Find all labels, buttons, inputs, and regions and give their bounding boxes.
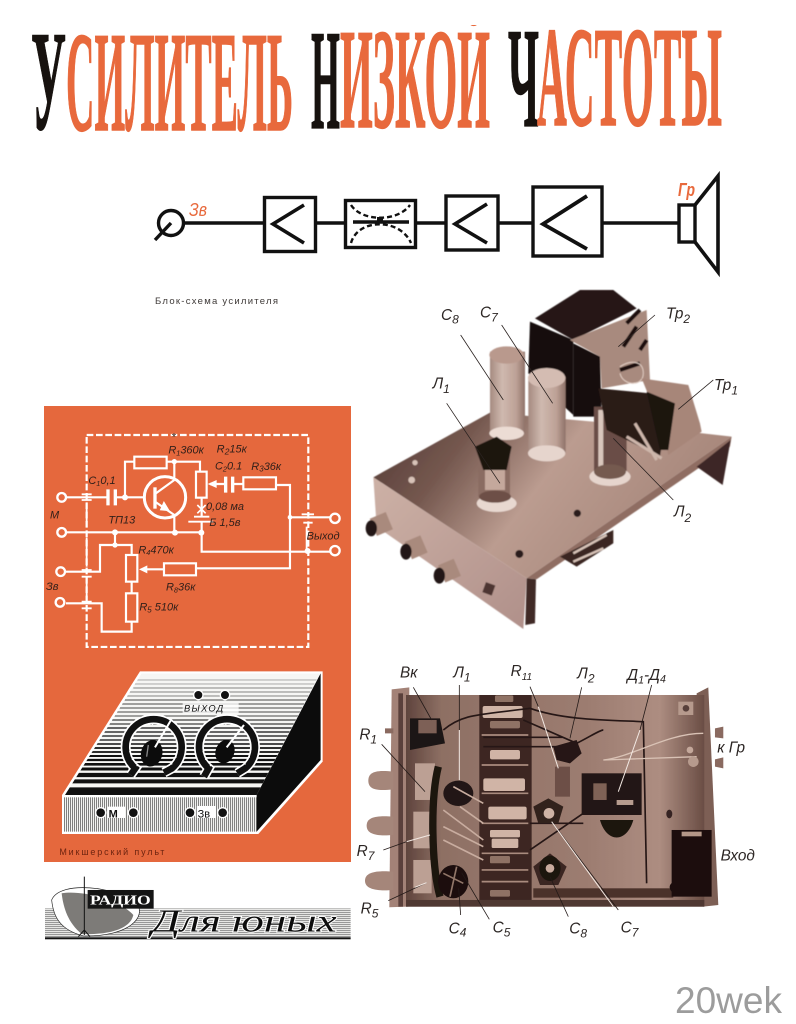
striped band xyxy=(45,908,351,938)
illustration: mixing console xyxy=(59,670,327,857)
component labels: С xyxy=(569,920,580,937)
circuit labels: 360к xyxy=(180,444,205,456)
antenna ellipse xyxy=(52,888,139,936)
transistor xyxy=(144,477,186,518)
front jacks and labels: Зв xyxy=(198,808,210,820)
switch xyxy=(410,718,445,750)
dial: left xyxy=(126,719,182,775)
resistors on board xyxy=(483,706,527,848)
component labels xyxy=(432,304,738,525)
photo: chassis underside xyxy=(357,663,755,940)
component labels: к Гр xyxy=(717,740,745,757)
component labels: Вход xyxy=(721,848,755,865)
circuit labels: Выход xyxy=(307,530,340,542)
circuit labels: С xyxy=(215,460,223,472)
component labels: Л xyxy=(453,664,464,681)
watermark: 20wek xyxy=(675,980,782,1021)
label: speaker: Гр xyxy=(678,180,695,200)
component labels: 1 xyxy=(731,384,738,398)
front jacks and labels xyxy=(96,806,228,820)
component labels: С xyxy=(480,304,491,321)
component labels: Вк xyxy=(400,664,418,681)
caption: mixer: Микшерский пульт xyxy=(59,847,164,857)
component labels: 4 xyxy=(460,926,467,940)
component labels: С xyxy=(493,920,504,937)
circuit labels: 0.1 xyxy=(227,460,242,472)
signal line xyxy=(184,221,678,225)
circuit labels: 36к xyxy=(178,582,196,594)
component labels: 1 xyxy=(370,732,377,746)
circuit labels: 15к xyxy=(229,444,248,456)
junctions and arrows xyxy=(112,459,311,573)
component labels: 1 xyxy=(638,674,644,686)
component labels: 1 xyxy=(464,670,471,684)
circuit labels: R xyxy=(139,602,147,614)
circuit labels: Б 1,5в xyxy=(209,517,241,529)
tube L1 xyxy=(478,447,510,497)
component labels: R xyxy=(359,726,370,743)
capacitor nut C7 xyxy=(533,798,563,823)
component labels: 2 xyxy=(683,511,691,525)
circuit labels: 1 xyxy=(176,448,180,457)
amplifier block 1 xyxy=(264,198,316,252)
component labels: 2 xyxy=(682,312,690,326)
component labels: R xyxy=(361,900,372,917)
circuit labels: М xyxy=(50,509,60,521)
component labels: С xyxy=(441,307,452,324)
circuit labels: R xyxy=(138,544,146,556)
component labels: 5 xyxy=(504,926,511,940)
block diagram xyxy=(155,176,718,272)
label: output: ВЫХОД xyxy=(184,704,225,714)
component labels: С xyxy=(621,920,632,937)
circuit labels: 36к xyxy=(264,461,282,473)
logo: Radio for the young xyxy=(45,877,351,939)
title: Ч xyxy=(508,0,539,157)
mast xyxy=(78,877,90,937)
bottom connector xyxy=(560,530,613,567)
component board xyxy=(479,695,532,900)
circuit labels: 5 xyxy=(147,605,152,614)
leader lines xyxy=(447,315,713,500)
component labels: С xyxy=(449,920,460,937)
component labels: Л xyxy=(577,665,588,682)
title: У xyxy=(31,2,66,160)
circuit labels: 4 xyxy=(146,548,150,557)
circuit labels: R xyxy=(168,444,176,456)
output jacks xyxy=(194,690,230,700)
resistors xyxy=(126,457,276,622)
capacitor C7 xyxy=(528,377,566,453)
chassis frame xyxy=(389,687,409,907)
front face xyxy=(64,797,257,832)
caption: block diagram: Блок-схема усилителя xyxy=(155,296,278,307)
component labels: 1 xyxy=(443,382,450,396)
component labels: 8 xyxy=(580,926,587,940)
circuit labels: Зв xyxy=(46,581,59,593)
input socket xyxy=(672,830,712,897)
icon: loudspeaker xyxy=(679,176,718,272)
circuit labels: 3 xyxy=(259,465,264,474)
title xyxy=(32,25,722,132)
component labels: Тр xyxy=(714,377,731,394)
circuit diagram xyxy=(46,432,340,647)
component labels: Л xyxy=(433,375,443,392)
tube socket L1 xyxy=(443,781,473,806)
capacitor C8 xyxy=(490,352,525,433)
component labels: 11 xyxy=(522,672,532,683)
circuit labels: 8 xyxy=(174,586,179,595)
tube L2 xyxy=(594,407,627,477)
leader lines xyxy=(382,685,652,919)
script title: Для юных xyxy=(147,903,337,939)
circuit labels: 2 xyxy=(224,447,230,457)
switch contacts xyxy=(82,494,314,608)
front panel xyxy=(373,477,527,629)
circuit labels xyxy=(46,432,340,614)
component labels: 7 xyxy=(632,926,640,940)
circuit labels: 0,08 ма xyxy=(206,501,244,513)
component labels: 2 xyxy=(587,671,595,685)
circuit labels: 510к xyxy=(152,602,179,614)
circuit labels: 0,1 xyxy=(100,475,116,487)
circuit labels: * xyxy=(171,432,176,444)
component labels: 5 xyxy=(372,906,379,920)
panel: orange background xyxy=(44,406,351,862)
component labels: 8 xyxy=(452,312,459,326)
label: pickup: Зв xyxy=(189,200,207,220)
photo: amplifier top view xyxy=(366,290,738,629)
component labels: -Д xyxy=(644,667,660,684)
right flange xyxy=(527,437,732,579)
circuit labels: 2 xyxy=(222,464,227,473)
terminals xyxy=(678,702,693,715)
circuit labels: 1 xyxy=(96,479,100,488)
front jacks and labels: М xyxy=(109,808,118,820)
component labels: Тр xyxy=(666,305,683,322)
transformer Tr2 xyxy=(535,290,637,340)
radio badge: РАДИО xyxy=(90,892,151,907)
component labels: 7 xyxy=(368,849,376,863)
wiring xyxy=(443,708,647,883)
amplifier block 2 xyxy=(446,196,498,250)
power amplifier block xyxy=(533,187,602,256)
capacitors xyxy=(108,477,233,522)
dashed enclosure xyxy=(87,435,308,647)
component labels: Л xyxy=(674,504,684,521)
icon: pickup xyxy=(155,210,184,240)
tone control block xyxy=(346,200,416,248)
side face xyxy=(257,673,321,832)
label: output xyxy=(183,703,239,714)
component labels: R xyxy=(511,663,522,680)
transformer Tr1 xyxy=(598,388,665,457)
capacitor nut C8 xyxy=(533,853,567,885)
circuit labels: R xyxy=(166,582,174,594)
wiring xyxy=(66,462,331,632)
chassis top plate xyxy=(373,413,732,578)
component labels: 7 xyxy=(491,310,499,324)
circuit labels: R xyxy=(251,461,259,473)
component labels xyxy=(357,663,755,940)
rectifier block xyxy=(582,773,642,815)
capacitor socket C4 C5 xyxy=(438,865,468,898)
knobs xyxy=(366,520,457,584)
potentiometers xyxy=(413,763,435,893)
component labels: R xyxy=(357,843,368,860)
component labels: Д xyxy=(627,667,638,684)
console outline xyxy=(62,671,323,834)
top face xyxy=(60,670,327,797)
circuit labels: R xyxy=(217,444,225,456)
component labels: 4 xyxy=(660,674,666,686)
tube socket L2 xyxy=(553,740,582,763)
circuit labels: ТП13 xyxy=(108,514,136,526)
terminals xyxy=(56,493,340,607)
radio badge xyxy=(88,890,154,909)
circuit labels: 470к xyxy=(150,544,175,556)
dial: right xyxy=(199,719,255,777)
title: Н xyxy=(311,1,340,159)
circuit labels: С xyxy=(88,475,96,487)
knobs xyxy=(365,771,393,890)
